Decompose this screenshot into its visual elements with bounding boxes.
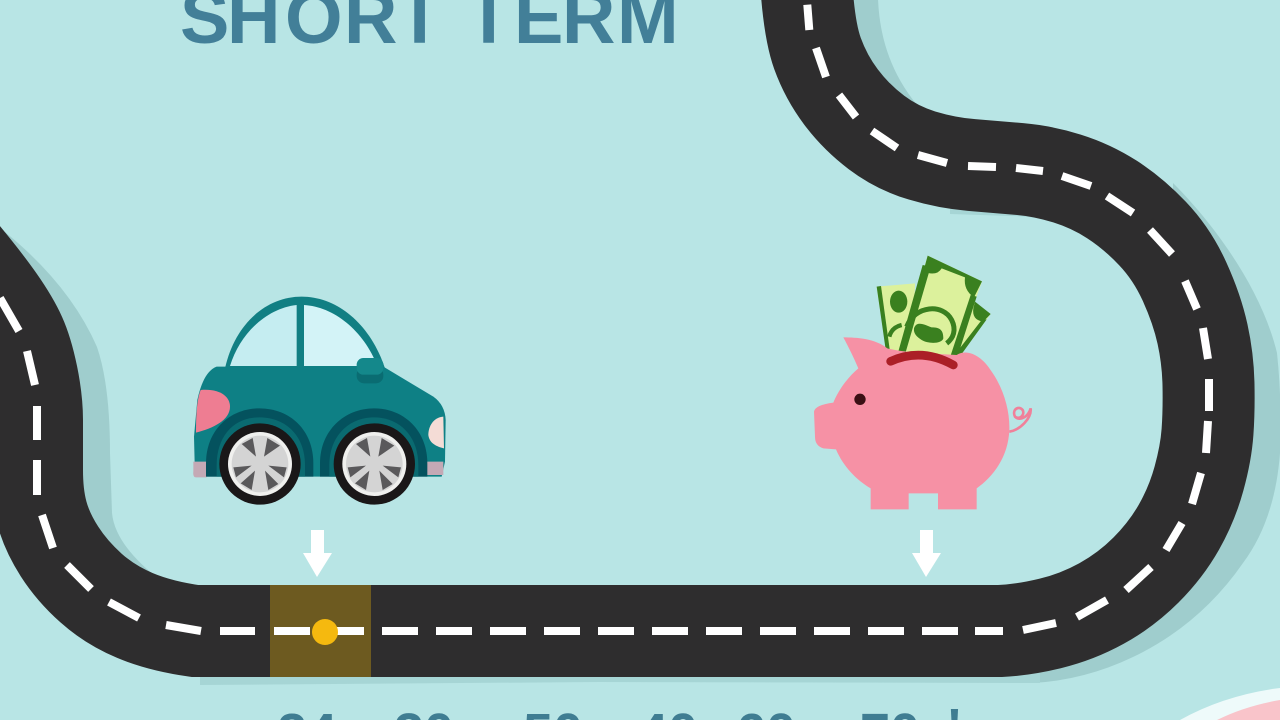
car body (194, 367, 446, 477)
right banknote (947, 302, 991, 360)
yellow position dot (312, 619, 338, 645)
sill trim (193, 462, 443, 477)
arrow: to piggy bank milestone (912, 530, 941, 577)
decorative corner shape (1180, 688, 1280, 720)
back banknote (877, 283, 915, 357)
icon: piggy bank with cash (814, 256, 1031, 509)
pig eye (854, 394, 866, 405)
arrow: to car milestone (303, 530, 332, 577)
pig body (814, 337, 1009, 509)
car roof and windows (225, 297, 385, 368)
front banknote (898, 256, 982, 359)
front wheel (334, 423, 415, 505)
timeline numbers (277, 698, 961, 720)
tail light (196, 390, 230, 433)
side mirror (357, 358, 383, 383)
head light (428, 417, 444, 448)
pig tail (1009, 408, 1031, 432)
wheel arches (206, 408, 427, 477)
coin slot (891, 355, 953, 365)
milestone marker patch (270, 585, 371, 677)
rear wheel (219, 423, 301, 505)
icon: car (193, 297, 446, 505)
